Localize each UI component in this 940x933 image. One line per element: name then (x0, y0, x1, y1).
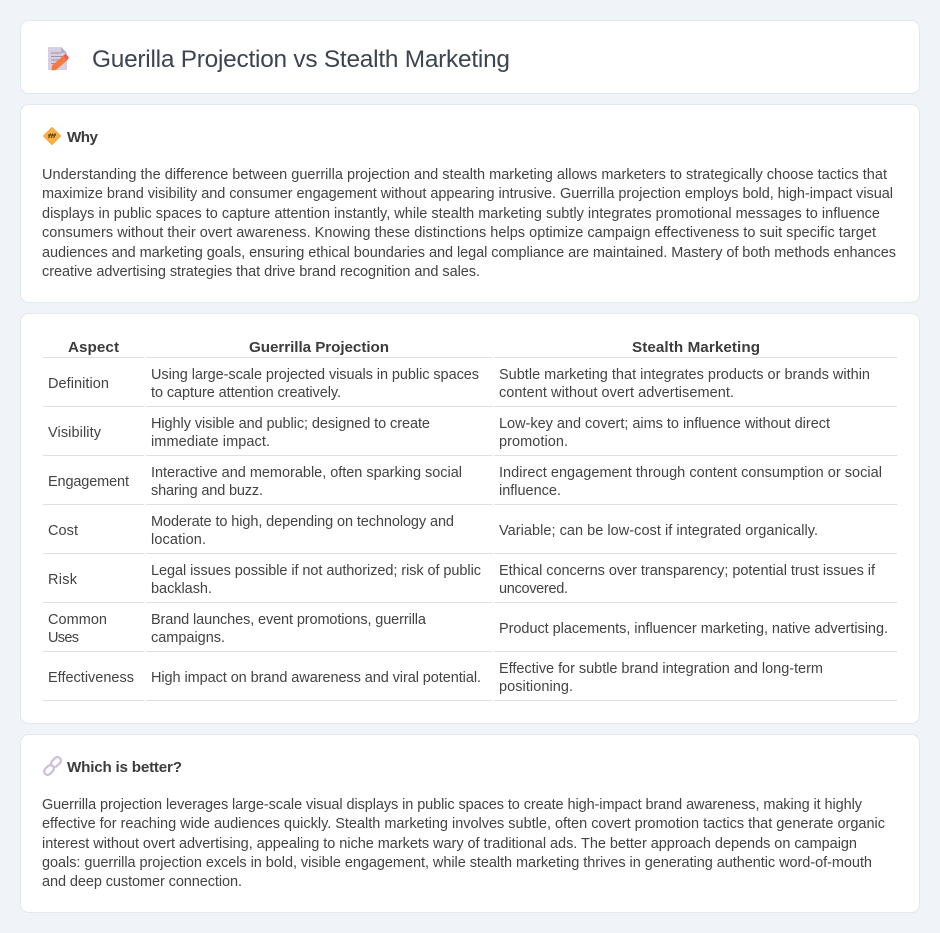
row: engagement: Indirect engagement through content consumption or social (499, 465, 882, 481)
text block: which paragraph: Guerrilla projection leverages large-scale visual displays in public spaces to create high-impact brand awareness, making it highly (42, 797, 863, 813)
table header: Stealth Marketing (632, 339, 760, 356)
row: definition: to capture attention creatively. (151, 385, 341, 401)
row: common uses: Brand launches, event promotions, guerrilla (151, 612, 427, 628)
row: effectiveness: positioning. (499, 679, 573, 695)
table header: Guerrilla Projection (249, 339, 389, 356)
heading: which is better: Which is better? (67, 759, 182, 776)
row: effectiveness: Effectiveness (48, 670, 134, 686)
row: effectiveness: High impact on brand awareness and viral potential. (151, 670, 481, 686)
icon: memo with pencil (48, 47, 69, 70)
table header: Aspect (68, 339, 119, 356)
row: definition (48, 367, 870, 401)
row: risk: Ethical concerns over transparency; potential trust issues if (499, 563, 876, 579)
row: visibility: Highly visible and public; designed to create (151, 416, 430, 432)
row: common uses: Common (48, 612, 107, 628)
row: engagement (48, 465, 882, 499)
row: common uses (48, 612, 888, 646)
table header (68, 339, 760, 356)
row: risk: uncovered. (499, 581, 568, 597)
row: cost: Variable; can be low-cost if integrated organically. (499, 523, 818, 539)
heading: why: Why (67, 129, 99, 146)
row: engagement: influence. (499, 483, 561, 499)
row: visibility: Visibility (48, 425, 102, 441)
row: engagement: sharing and buzz. (151, 483, 263, 499)
row: visibility (48, 416, 830, 450)
row: definition: Definition (48, 376, 109, 392)
panel: comparison table (20, 314, 920, 724)
text block: which paragraph: interest without overt advertising, appealing to niche markets wary of traditional ads. The better approach depends on campaign (42, 836, 857, 852)
row: visibility: promotion. (499, 434, 568, 450)
row: risk (48, 563, 876, 597)
row: cost: Moderate to high, depending on technology and (151, 514, 454, 530)
row: common uses: Product placements, influencer marketing, native advertising. (499, 621, 888, 637)
text block: which paragraph: and deep customer connection. (42, 874, 242, 890)
row: definition: Subtle marketing that integrates products or brands within (499, 367, 870, 383)
row: common uses: campaigns. (151, 630, 225, 646)
row: risk: Risk (48, 572, 78, 588)
icon: link (43, 756, 62, 776)
row: visibility: immediate impact. (151, 434, 270, 450)
title: Guerilla Projection vs Stealth Marketing (92, 46, 510, 73)
row: risk: backlash. (151, 581, 212, 597)
row: effectiveness (48, 661, 823, 695)
text block: why paragraph: displays in public spaces to capture attention instantly, while stealth marketing subtly integrates promotional messages to influence (42, 206, 880, 222)
row: cost: Cost (48, 523, 78, 539)
panel: which is better (20, 734, 920, 912)
text block: why paragraph: Understanding the difference between guerrilla projection and stealth marketing allows marketers to strategically choose tactics that (42, 167, 887, 183)
text block: why paragraph: maximize brand visibility and consumer engagement without appearing intrusive. Guerrilla projection employs bold, high-impact visual (42, 186, 893, 202)
row: definition: Using large-scale projected visuals in public spaces (151, 367, 479, 383)
text block: why paragraph: consumers without their overt awareness. Knowing these distinctions helps optimize campaign effectiveness to suit specific target (42, 225, 876, 241)
row: common uses: Uses (48, 630, 79, 646)
row: risk: Legal issues possible if not authorized; risk of public (151, 563, 481, 579)
icon: diamond sign (44, 128, 60, 144)
row: definition: content without overt advertisement. (499, 385, 734, 401)
row: engagement: Interactive and memorable, often sparking social (151, 465, 462, 481)
panel: title header (20, 20, 920, 94)
row: visibility: Low-key and covert; aims to influence without direct (499, 416, 830, 432)
text block: why paragraph: creative advertising strategies that drive brand recognition and sales. (42, 264, 480, 280)
panel: why (20, 104, 920, 302)
text block: which paragraph: effective for reaching wide audiences quickly. Stealth marketing involves subtle, often covert promotion tactics that generate organic (42, 816, 885, 832)
text block: which paragraph (42, 797, 885, 890)
row: effectiveness: Effective for subtle brand integration and long-term (499, 661, 823, 677)
row: engagement: Engagement (48, 474, 129, 490)
text block: why paragraph: audiences and marketing goals, ensuring ethical boundaries and legal compliance are maintained. Mastery of both methods enhances (42, 245, 896, 261)
text block: which paragraph: goals: guerrilla projection excels in bold, visible engagement, while stealth marketing thrives in generating authentic word-of-mouth (42, 855, 872, 871)
row: cost: location. (151, 532, 206, 548)
text block: why paragraph (42, 167, 896, 280)
row: cost (48, 514, 818, 548)
